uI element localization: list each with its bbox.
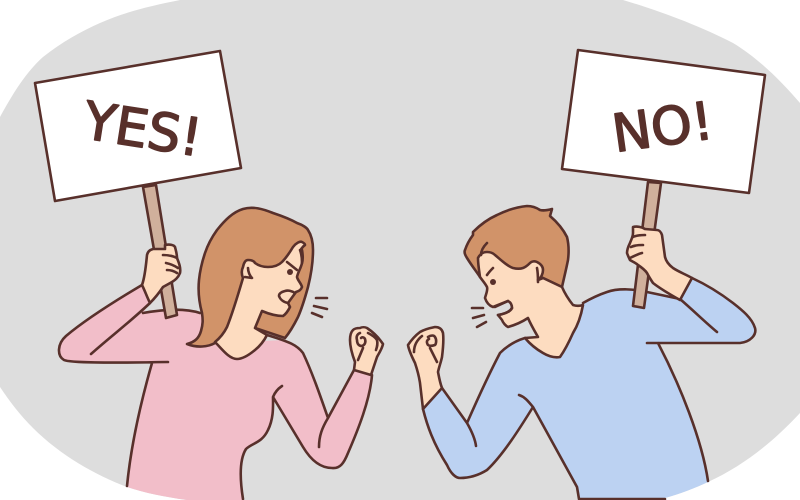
- left sign board: [35, 51, 241, 201]
- woman finger lines: [163, 255, 178, 273]
- woman sign pole: [143, 185, 177, 318]
- woman eye: [287, 269, 293, 275]
- man face details: [481, 243, 538, 315]
- woman neck and face: [215, 242, 305, 359]
- woman figure: [59, 185, 383, 500]
- left sign: [35, 51, 241, 201]
- man body outline: [423, 278, 755, 499]
- woman raised hand: [142, 245, 180, 303]
- no text: NO!: [609, 91, 717, 165]
- man finger lines: [630, 235, 645, 258]
- man figure: [408, 182, 755, 500]
- woman raised arm and torso: [59, 285, 372, 500]
- man hair: [465, 206, 569, 290]
- man sign pole: [633, 182, 661, 308]
- woman shout marks: [312, 298, 327, 317]
- man raised hand and wrist: [627, 227, 692, 300]
- woman fist: [350, 327, 383, 375]
- man eye: [490, 279, 496, 285]
- yes text: YES!: [78, 91, 206, 169]
- woman fist lines: [357, 333, 377, 360]
- man torso and arms: [423, 278, 755, 500]
- woman hair: [187, 208, 313, 347]
- right sign: [562, 50, 765, 193]
- man shout marks: [472, 308, 486, 327]
- right sign board: [562, 50, 765, 193]
- man fist lines: [414, 336, 437, 362]
- woman face details: [245, 250, 303, 303]
- man fist: [408, 327, 443, 409]
- man neck and face: [478, 252, 583, 357]
- woman torso outline: [59, 285, 372, 499]
